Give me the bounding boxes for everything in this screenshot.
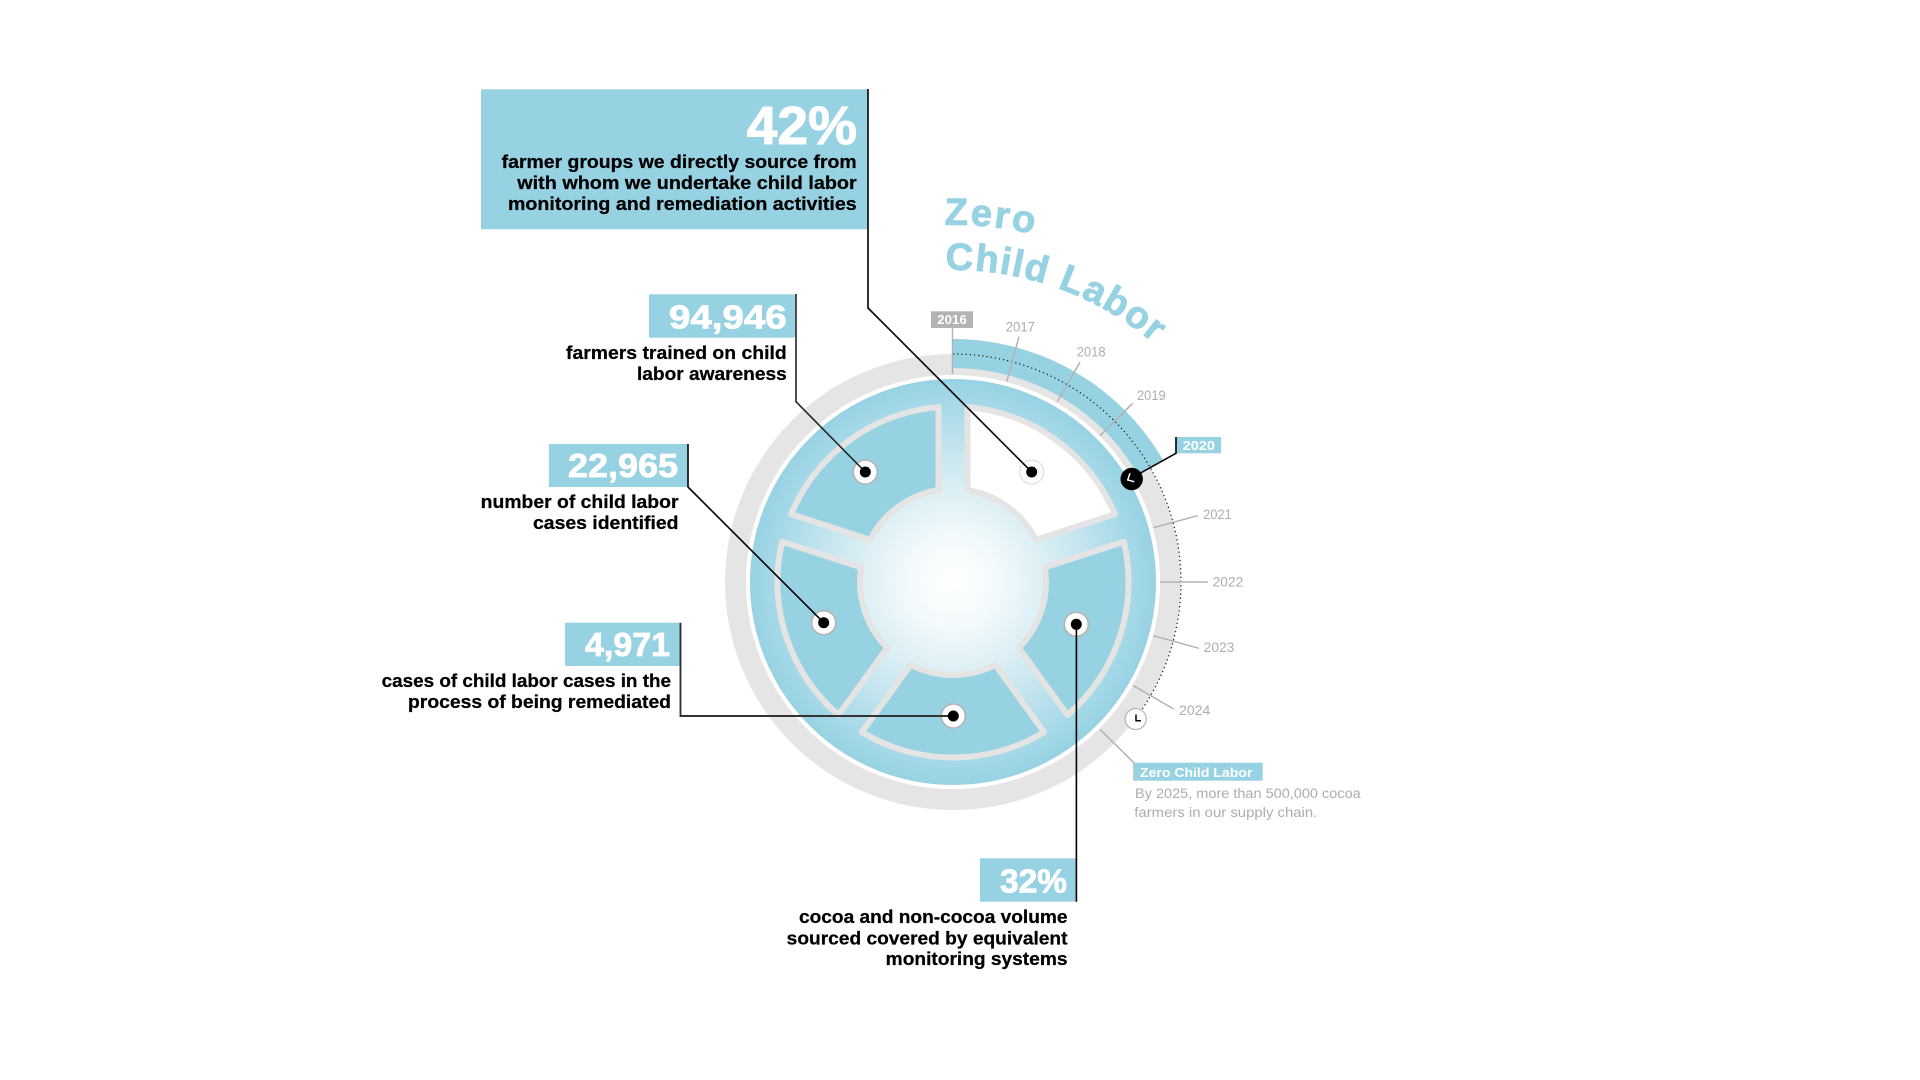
stat: 42%: farmer groups we directly source from: [502, 152, 857, 172]
stat: 42%: 42%: [747, 96, 857, 156]
2020 tag with leader: [1140, 437, 1221, 473]
stat: 94,946: labor awareness: [637, 364, 787, 384]
2022: 2022: [1213, 575, 1243, 590]
marker dot: 94,946: [860, 466, 871, 478]
2021: [1153, 507, 1232, 528]
title: Zero Child Labor: Child Labor: [946, 242, 1166, 339]
title: Zero Child Labor: [945, 198, 1166, 339]
icon: clock end 2025: [1125, 708, 1146, 730]
2024: 2024: [1179, 703, 1211, 718]
icon: clock current 2020: [1120, 468, 1143, 490]
2016 tag: 2016: [937, 312, 967, 327]
2023: [1153, 636, 1234, 655]
marker dot: 4,971: [948, 710, 959, 722]
stat: 32%: sourced covered by equivalent: [787, 928, 1068, 948]
stat: 94,946: [566, 294, 865, 472]
stat: 32%: monitoring systems: [886, 949, 1068, 969]
marker ring: 94,946: [853, 460, 877, 484]
stat: 22,965: cases identified: [533, 513, 678, 533]
stat: 42%: monitoring and remediation activities: [508, 194, 857, 214]
marker ring: 22,965: [812, 611, 836, 635]
stat: 94,946: farmers trained on child: [566, 343, 787, 363]
stat: 22,965: number of child labor: [481, 492, 678, 512]
2017: [1006, 320, 1035, 382]
callout: Zero Child Labor target: farmers in our supply chain.: [1134, 805, 1317, 820]
wheel segments: [719, 374, 1169, 819]
callout: Zero Child Labor target: By 2025, more than 500,000 cocoa: [1135, 786, 1361, 801]
stat: 22,965: 22,965: [568, 447, 678, 484]
marker rings: [812, 460, 1088, 728]
marker dot: 42%: [1026, 466, 1037, 478]
segment: 22,965: [719, 521, 916, 715]
dotted timeline path: [953, 354, 1181, 719]
2019: [1100, 388, 1166, 436]
callout: Zero Child Labor target: Zero Child Labor: [1140, 765, 1252, 780]
marker ring: 42%: [1020, 460, 1044, 484]
segment: 32%: [998, 542, 1169, 723]
stat: 4,971: process of being remediated: [408, 692, 671, 712]
2018: 2018: [1077, 345, 1106, 360]
stat: 22,965: [481, 444, 824, 623]
stat: 4,971: cases of child labor cases in the: [382, 671, 671, 691]
2024: [1133, 686, 1211, 718]
stat: 32%: cocoa and non-cocoa volume: [799, 907, 1068, 927]
marker dot: 22,965: [818, 617, 829, 628]
2023: 2023: [1204, 640, 1234, 655]
stat: 42%: [481, 89, 1032, 472]
stat: 4,971: [382, 623, 948, 716]
2020 tag with leader: 2020: [1183, 438, 1215, 453]
2021: 2021: [1203, 507, 1232, 522]
2019: 2019: [1137, 388, 1166, 403]
marker ring: 32%: [1064, 612, 1088, 636]
timeline progress arc 2016-2020: [953, 339, 1163, 475]
marker ring: 4,971: [941, 704, 965, 728]
main disk with radial gradient: [748, 377, 1158, 787]
title: Zero Child Labor: Zero: [945, 198, 1034, 233]
2017: 2017: [1006, 320, 1035, 335]
2016 tag: [931, 311, 973, 374]
year ticks and labels: [931, 311, 1243, 718]
segment: 94,946: [791, 374, 963, 555]
stat: 32%: 32%: [1000, 862, 1067, 900]
2022: [1160, 575, 1243, 590]
2018: [1057, 345, 1106, 402]
marker dot: 32%: [1071, 619, 1082, 630]
timeline ring: grey outer band: [736, 364, 1170, 800]
segment: 4,971: [847, 625, 1044, 819]
stat: 42%: with whom we undertake child labor: [516, 173, 857, 193]
callout: Zero Child Labor target: [1100, 729, 1361, 820]
stat: 32%: [787, 624, 1076, 969]
segment: 42% highlighted white: [968, 407, 1115, 540]
marker dots: [818, 466, 1082, 722]
stat: 94,946: 94,946: [669, 298, 787, 336]
stat: 4,971: 4,971: [585, 626, 670, 663]
